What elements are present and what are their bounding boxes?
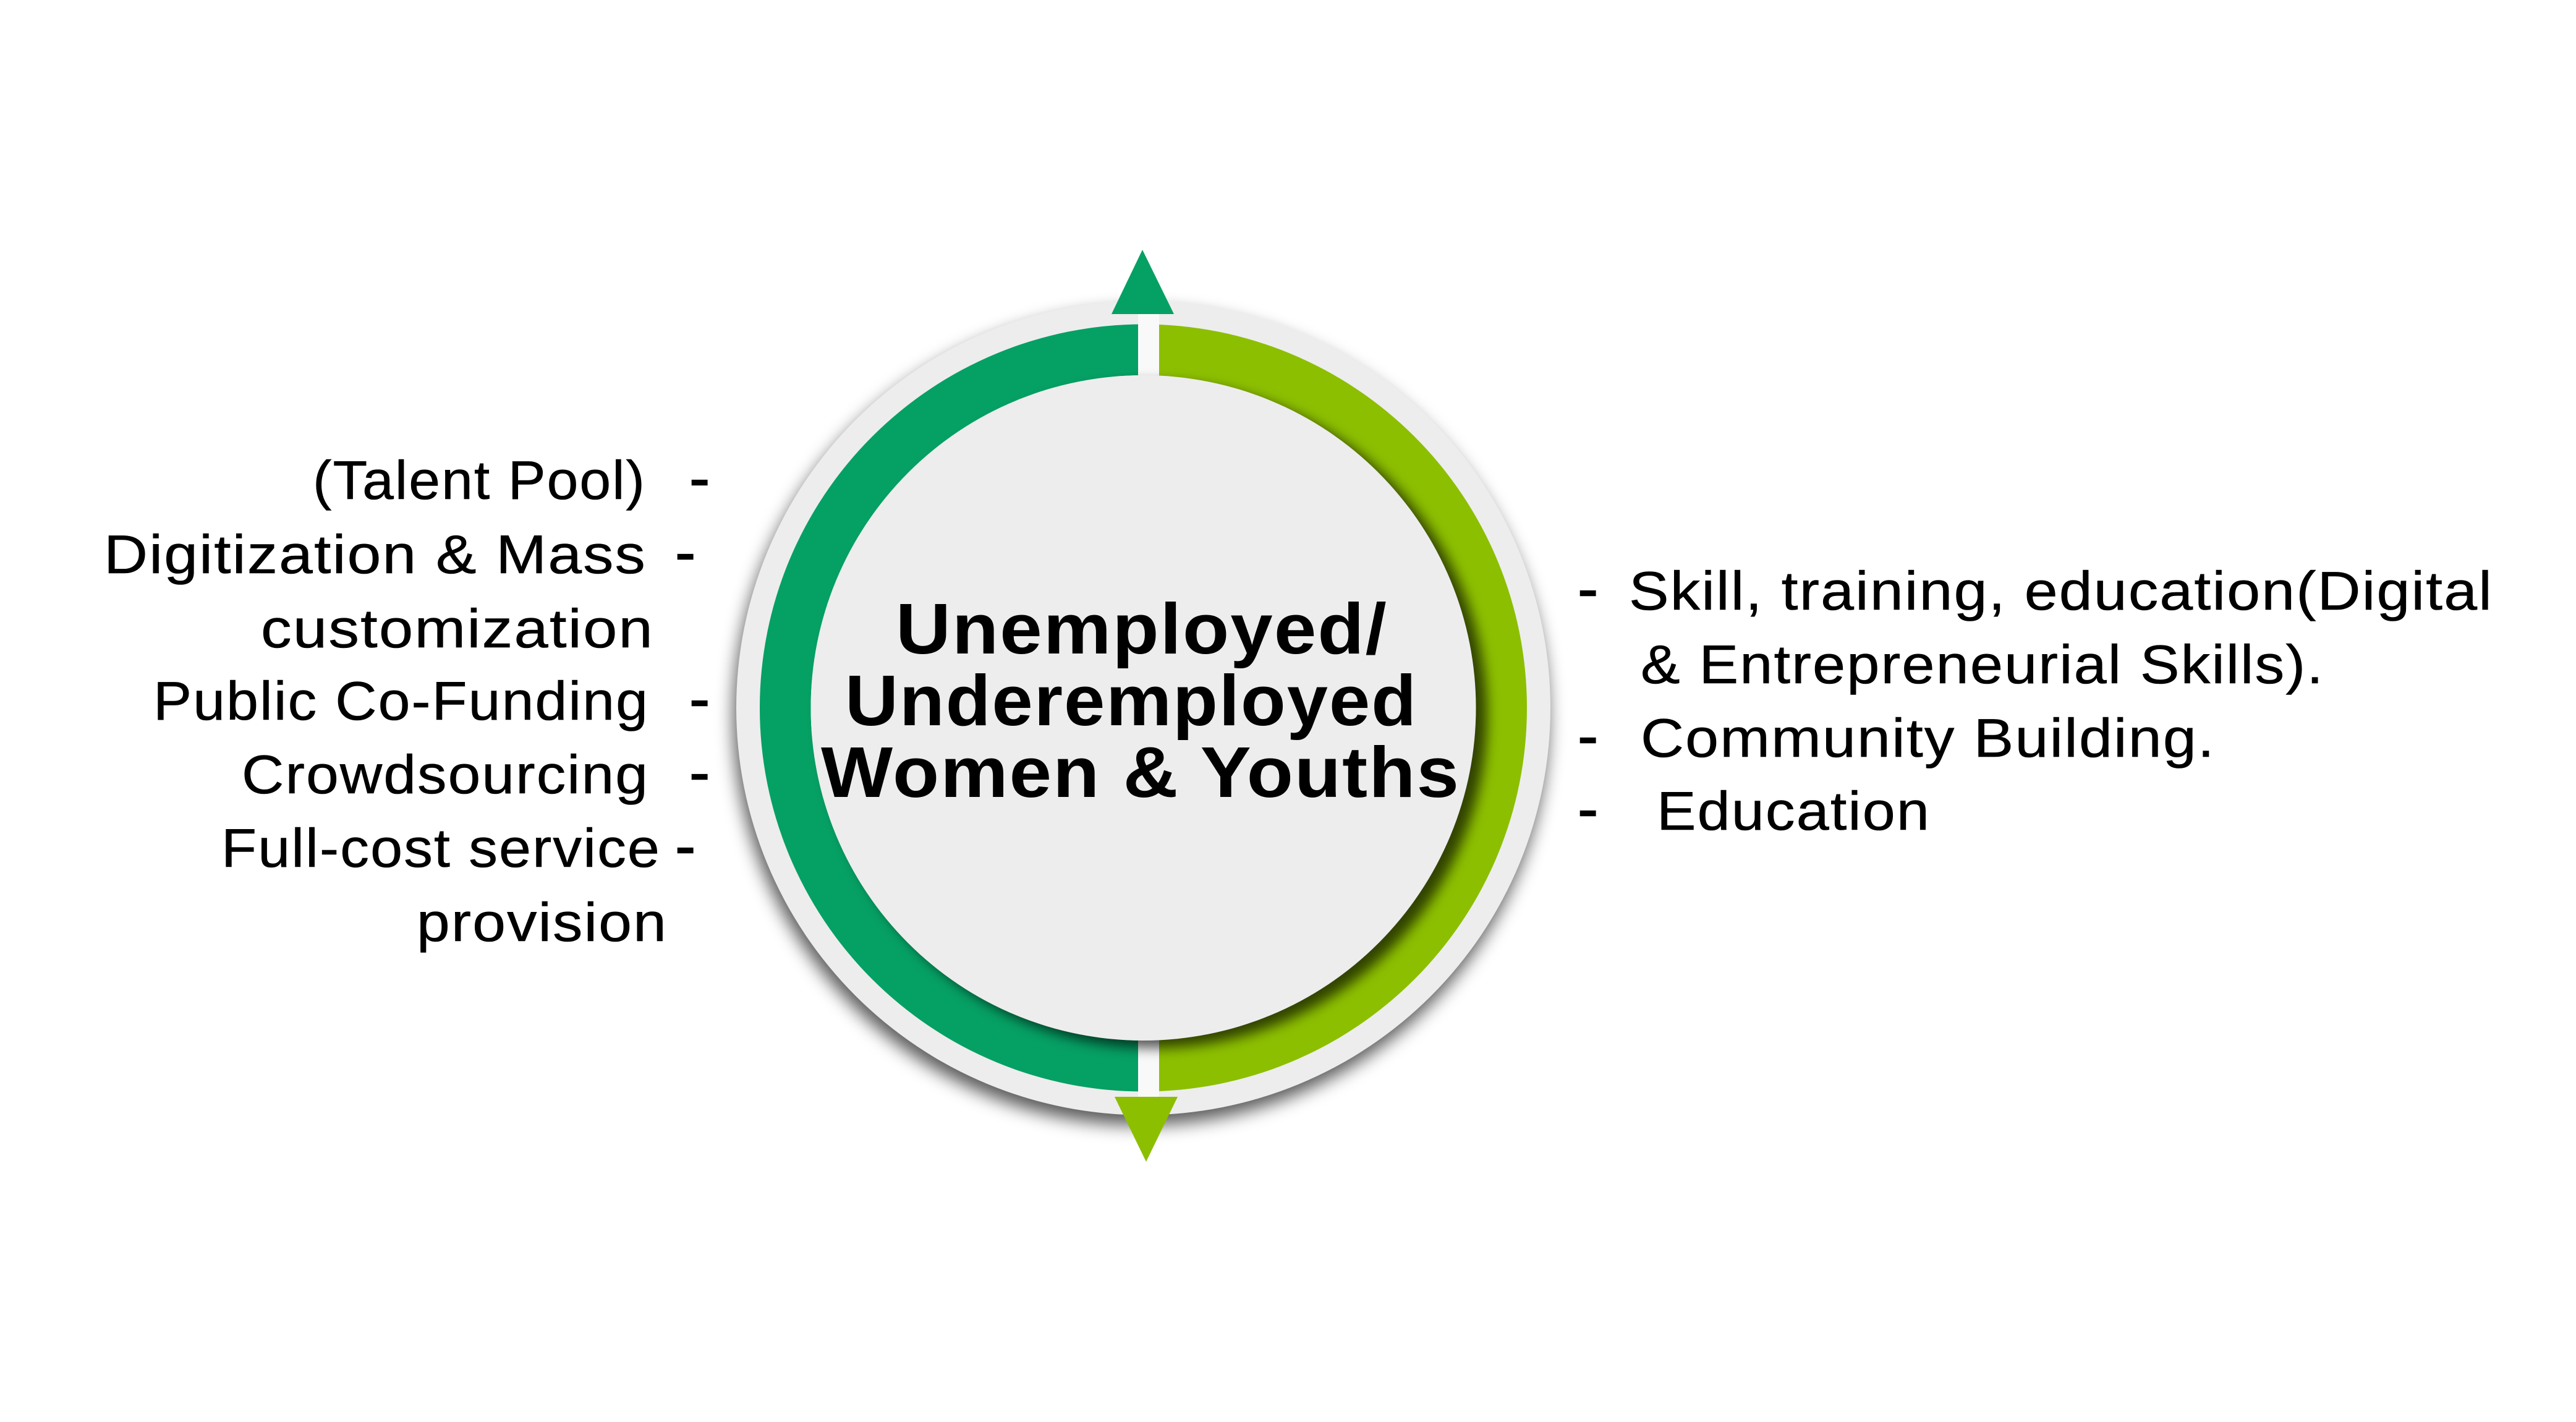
center title: Women & Youths <box>821 732 1460 812</box>
outer grey disc <box>736 300 1550 1115</box>
left list: funding and talent: - <box>689 443 710 513</box>
top ring gap <box>1138 314 1159 376</box>
center title: Unemployed/ <box>896 589 1388 669</box>
left list: funding and talent: - <box>689 664 710 733</box>
inner grey disc <box>811 375 1476 1041</box>
outer disc shadow <box>734 310 1548 1125</box>
left list: funding and talent: customization <box>261 598 654 659</box>
center title: Underemployed <box>845 660 1418 741</box>
bottom ring gap <box>1138 1039 1159 1097</box>
center title <box>821 589 1460 812</box>
right list: skills and community: & Entrepreneurial Skills). <box>1641 634 2324 695</box>
left list: funding and talent: Public Co-Funding <box>153 670 649 731</box>
left list: funding and talent: - <box>675 811 695 880</box>
left list: funding and talent: - <box>689 738 710 807</box>
circular diagram <box>734 250 1550 1162</box>
arrow: down lime triangle <box>1115 1097 1178 1162</box>
arrow: up green triangle <box>1112 250 1174 314</box>
right list: skills and community: Skill, training, education(Digital <box>1629 560 2493 621</box>
left list: funding and talent: (Talent Pool) <box>313 449 646 511</box>
left green half ring <box>760 324 1144 1092</box>
right list: skills and community: - <box>1578 554 1598 623</box>
right list: skills and community <box>1578 554 2493 843</box>
left list: funding and talent: - <box>675 517 695 587</box>
right list: skills and community: - <box>1578 774 1598 843</box>
right list: skills and community: - <box>1578 701 1598 770</box>
left list: funding and talent: Full-cost service <box>221 817 661 879</box>
right list: skills and community: Education <box>1657 780 1931 841</box>
left list: funding and talent: Digitization & Mass <box>104 524 647 585</box>
left list: funding and talent <box>104 443 710 953</box>
left list: funding and talent: Crowdsourcing <box>242 744 649 805</box>
left list: funding and talent: provision <box>417 892 668 953</box>
right lime half ring <box>1144 324 1527 1092</box>
inner disc shadow <box>822 383 1487 1048</box>
right list: skills and community: Community Building. <box>1641 707 2216 768</box>
